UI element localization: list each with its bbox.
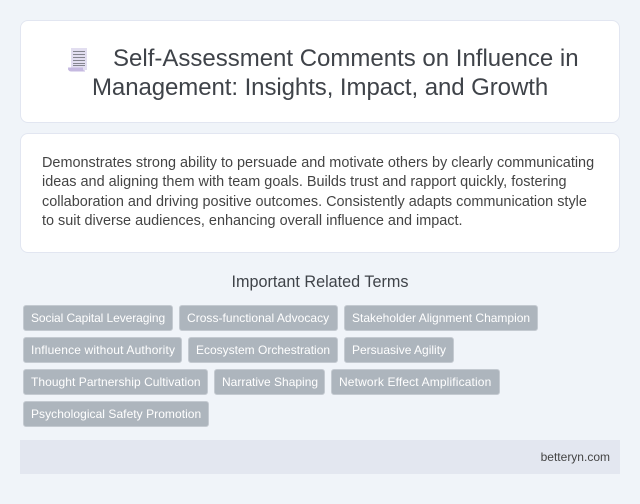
description text	[42, 155, 594, 229]
tag	[179, 305, 338, 331]
tag: Thought Partnership Cultivation	[31, 375, 201, 389]
related term tags	[23, 305, 538, 427]
title line 1: Self-Assessment Comments on Influence in	[113, 45, 579, 72]
footer bar	[20, 440, 620, 474]
description text: Demonstrates strong ability to persuade and motivate others by clearly communicating	[42, 155, 594, 171]
description text: to suit diverse audiences, enhancing overall influence and impact.	[42, 213, 463, 229]
related terms heading: Important Related Terms	[232, 273, 408, 291]
tag: Influence without Authority	[31, 343, 175, 357]
tag	[23, 337, 182, 363]
description text: ideas and aligning them with team goals. Builds trust and rapport quickly, fostering	[42, 174, 567, 190]
description text: collaboration and driving positive outcomes. Consistently adapts communication style	[42, 194, 587, 210]
tag: Social Capital Leveraging	[31, 311, 165, 325]
tag	[23, 305, 173, 331]
tag	[214, 369, 325, 395]
footer bar: betteryn.com	[541, 450, 610, 464]
title line 2: Management: Insights, Impact, and Growth	[92, 74, 548, 101]
description panel	[20, 133, 620, 253]
tag: Persuasive Agility	[352, 343, 446, 357]
tag: Psychological Safety Promotion	[31, 407, 201, 421]
icon: document scroll	[68, 48, 87, 72]
tag: Network Effect Amplification	[339, 375, 491, 389]
tag	[23, 401, 209, 427]
header panel	[20, 20, 620, 123]
tag	[344, 305, 538, 331]
tag: Stakeholder Alignment Champion	[352, 311, 530, 325]
tag	[344, 337, 454, 363]
tag: Ecosystem Orchestration	[196, 343, 330, 357]
tag: Cross-functional Advocacy	[187, 311, 329, 325]
tag	[188, 337, 338, 363]
tag	[331, 369, 500, 395]
tag	[23, 369, 208, 395]
tag: Narrative Shaping	[222, 375, 318, 389]
